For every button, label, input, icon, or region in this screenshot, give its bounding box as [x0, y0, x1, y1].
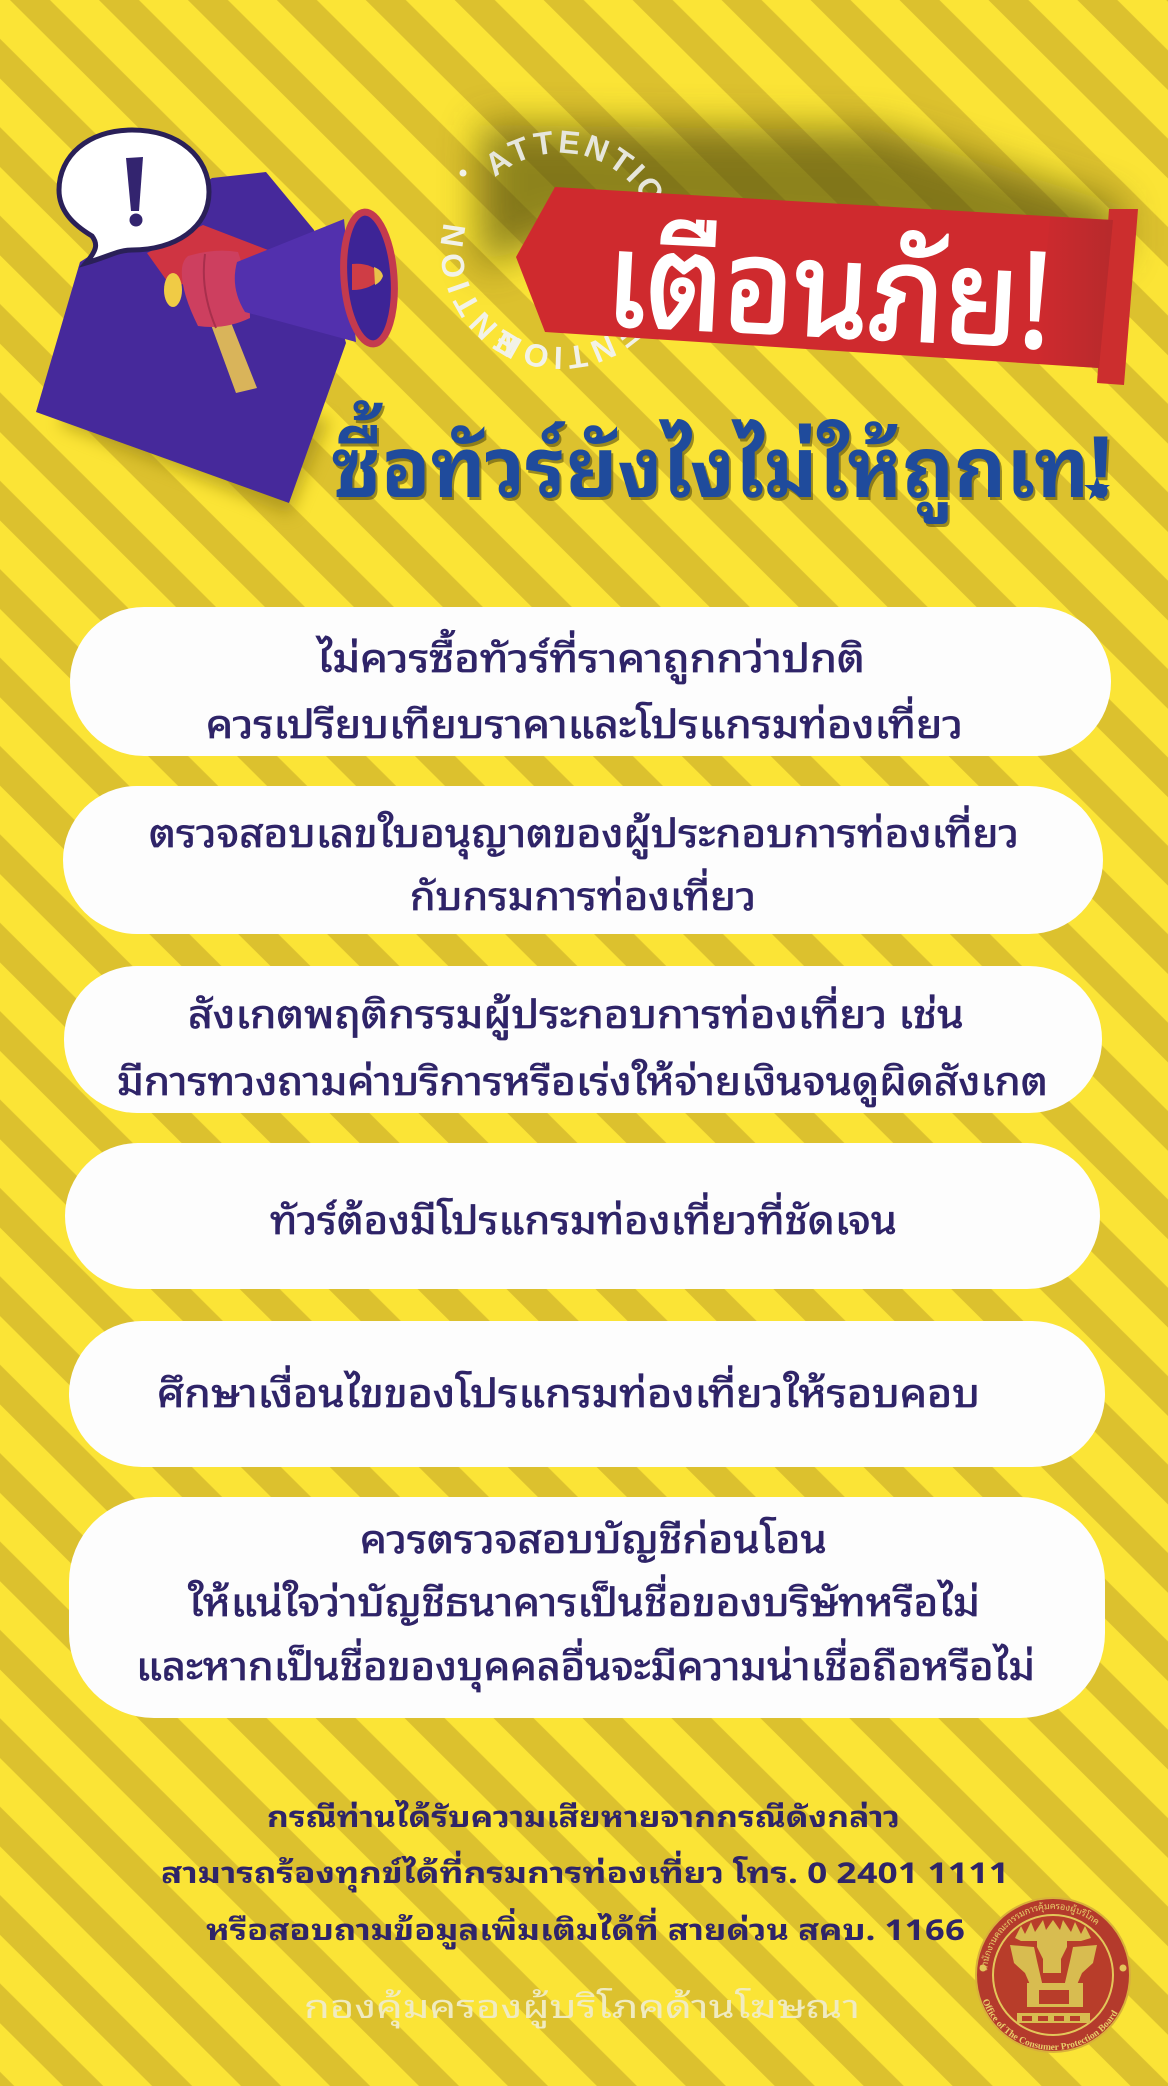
panel: tip 2	[63, 786, 1103, 934]
ring text: attention: ENTION	[440, 224, 518, 358]
shadow behind banner	[480, 125, 1120, 270]
envelope	[36, 172, 346, 503]
megaphone driver	[352, 264, 383, 290]
ring text: attention: ENTION	[494, 330, 641, 369]
panel: tip 6: ให้แน่ใจว่าบัญชีธนาคารเป็นชื่อของบริษัทหรือไม่	[188, 1567, 980, 1630]
icon: consumer protection board seal: Office of The Consumer Protection Board	[983, 1999, 1118, 2050]
ring text: attention: ATTENTION	[489, 130, 662, 194]
handle	[210, 320, 257, 393]
icon: envelope with megaphone and speech bubble	[36, 130, 399, 515]
megaphone back nub	[164, 273, 182, 307]
banner title: เตือนภัย!	[602, 161, 1058, 395]
panel: tip 5: ศึกษาเงื่อนไขของโปรแกรมท่องเที่ยวให้รอบคอบ	[157, 1358, 980, 1421]
panel: tip 6: และหากเป็นชื่อของบุคคลอื่นจะมีความน่าเชื่อถือหรือไม่	[136, 1631, 1035, 1694]
panel: tip 3: สังเกตพฤติกรรมผู้ประกอบการท่องเที่ยว เช่น	[188, 979, 964, 1042]
panel: tip 3	[64, 966, 1102, 1113]
footer contact text: สามารถร้องทุกข์ได้ที่กรมการท่องเที่ยว โทร. 0 2401 1111	[161, 1848, 1009, 1894]
megaphone collar	[182, 251, 250, 327]
seal emblem	[1010, 1920, 1097, 2023]
subtitle: ซื้อทัวร์ยังไงไม่ให้ถูกเท!	[332, 393, 1112, 527]
panel: tip 5	[69, 1321, 1105, 1467]
megaphone cone	[235, 219, 356, 342]
seal ring text: สำนักงานคณะกรรมการคุ้มครองผู้บริโภค	[980, 1902, 1098, 1970]
panel: tip 4: ทัวร์ต้องมีโปรแกรมท่องเที่ยวที่ชัดเจน	[270, 1185, 897, 1248]
exclamation mark	[126, 157, 143, 226]
footer contact text: กรณีท่านได้รับความเสียหายจากกรณีดังกล่าว	[267, 1792, 900, 1838]
panel: tip 6: ควรตรวจสอบบัญชีก่อนโอน	[360, 1504, 827, 1567]
panel: tip 1: ไม่ควรซื้อทัวร์ที่ราคาถูกกว่าปกติ	[316, 623, 865, 686]
ring text: attention	[440, 130, 662, 369]
panel: tip 2: ตรวจสอบเลขใบอนุญาตของผู้ประกอบการท่องเที่ยว	[149, 798, 1019, 861]
panel: tip 3: มีการทวงถามค่าบริการหรือเร่งให้จ่ายเงินจนดูผิดสังเกต	[117, 1046, 1048, 1109]
subtitle: ซื้อทัวร์ยังไงไม่ให้ถูกเท!	[334, 396, 1114, 530]
footer contact text: หรือสอบถามข้อมูลเพิ่มเติมได้ที่ สายด่วน สคบ. 1166	[206, 1905, 965, 1951]
footer agency name: กองคุ้มครองผู้บริโภคด้านโฆษณา	[304, 1977, 860, 2030]
red letter	[147, 225, 268, 288]
banner ribbon	[516, 161, 1138, 395]
panel: tip 6	[69, 1497, 1105, 1718]
panel: tip 2: กับกรมการท่องเที่ยว	[410, 861, 756, 924]
icon: consumer protection board seal	[975, 1897, 1131, 2053]
panel: tip 1: ควรเปรียบเทียบราคาและโปรแกรมท่องเที่ยว	[206, 689, 963, 752]
panel: tip 1	[70, 607, 1111, 756]
megaphone mouth	[339, 210, 399, 346]
footer contact text	[161, 1792, 1009, 1951]
speech bubble	[59, 130, 209, 263]
panel: tip 4	[65, 1143, 1100, 1289]
